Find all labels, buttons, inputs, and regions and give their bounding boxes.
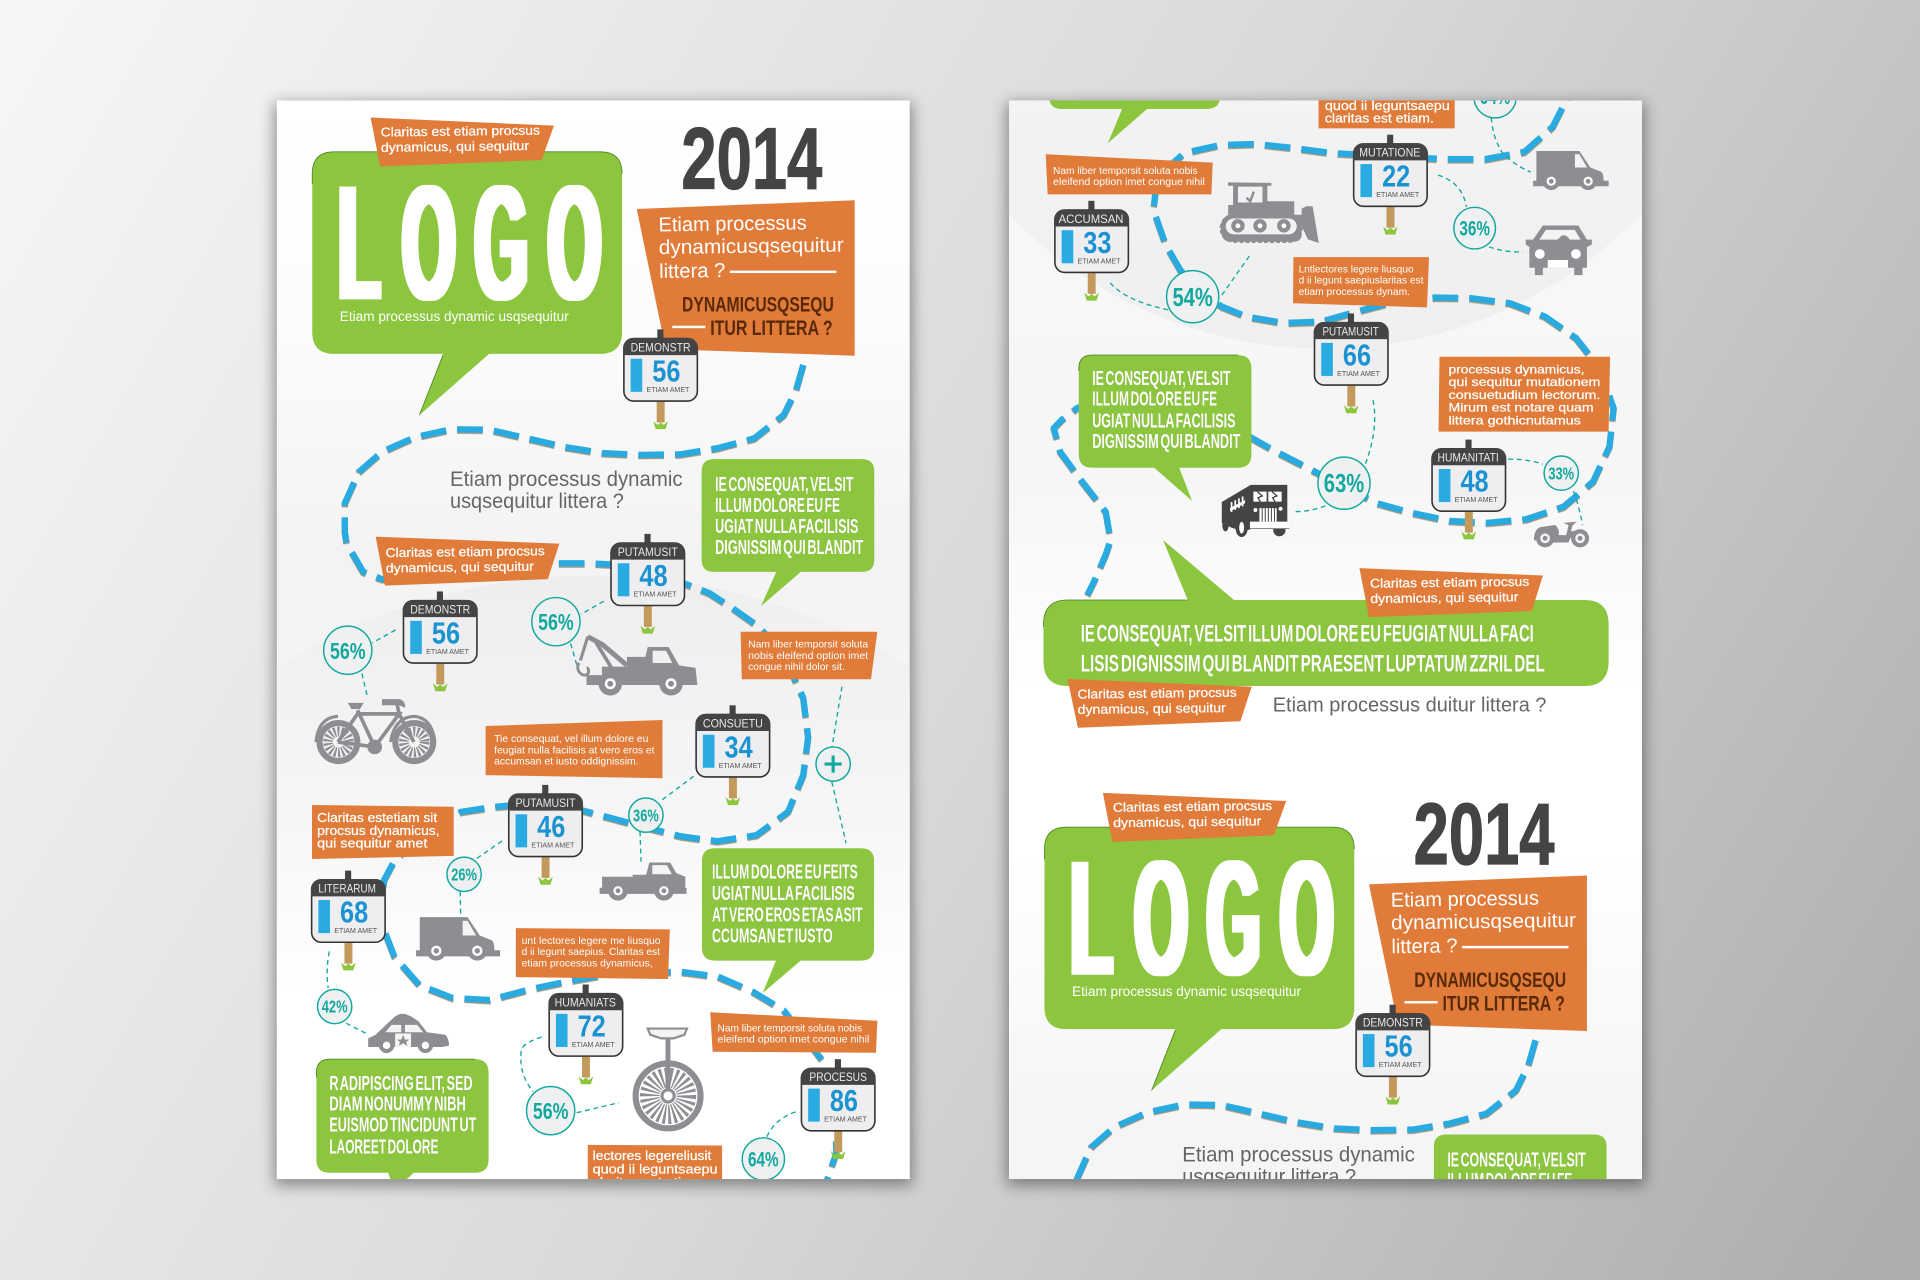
percent badge 36 right: 36% <box>1459 218 1490 241</box>
sign: humaniats 72 <box>549 984 623 1084</box>
percent badge 54: 54% <box>1172 284 1213 312</box>
tag: claritas on wide bubble <box>1359 568 1543 617</box>
icon: car front <box>1526 226 1592 275</box>
panel: green bubble repeat: IE CONSEQUAT, VELSIT <box>1447 1149 1586 1171</box>
tag: processus dynamicus <box>1439 357 1610 432</box>
sign: humanitati 48: ETIAM AMET <box>1455 496 1498 504</box>
sign: demonstr 56 repeat: 56 <box>1385 1030 1413 1064</box>
tag: lntlectores <box>1293 257 1429 307</box>
percent badge 63 <box>1318 457 1370 509</box>
icon: bus <box>1222 485 1289 537</box>
dashed road right page <box>1054 76 1614 595</box>
panel: green bubble one: ILLUM DOLORE EU FE <box>715 495 840 517</box>
tag: nam liber right: nobis eleifend option imet <box>748 651 868 662</box>
sign: mutatione 22 <box>1353 135 1428 234</box>
tag: nam liber lower <box>710 1012 877 1053</box>
year heading repeat: 2014 <box>1414 786 1554 883</box>
percent badge 63: 63% <box>1324 470 1364 498</box>
icon: delivery van right <box>1533 151 1609 190</box>
text: road question <box>450 468 683 513</box>
page shadows <box>274 103 1644 1185</box>
tag: quod continuation <box>1319 86 1455 128</box>
logo wordmark: LOGO <box>338 151 601 335</box>
sign: demonstr 56 repeat: ETIAM AMET <box>1379 1061 1422 1069</box>
icon: unicycle <box>636 1029 701 1128</box>
panel: wide green bubble <box>1044 540 1609 686</box>
plus badge <box>816 747 850 781</box>
tag: processus dynamicus: Mirum est notare quam <box>1449 401 1594 415</box>
icon: police car <box>368 1014 449 1053</box>
tag: processus dynamicus: processus dynamicus, <box>1449 362 1584 376</box>
panel: right page <box>1009 73 1642 1207</box>
dashed connectors left page <box>327 601 846 1138</box>
panel: green bubble right page: ILLUM DOLORE EU FE <box>1092 389 1217 411</box>
percent badge 56 unicycle: 56% <box>533 1098 569 1124</box>
panel: orange question card repeat: littera ? <box>1391 935 1458 958</box>
sign: consuetu 34: ETIAM AMET <box>719 762 762 770</box>
sign: procesus 86: 86 <box>830 1084 858 1118</box>
tag: lectores clipped at page foot: lectores legereliusit <box>593 1148 712 1163</box>
sign: humanitati 48: HUMANITATI <box>1438 453 1499 465</box>
tag: tie consequat <box>486 720 662 778</box>
sign: accumsan 33 <box>1054 201 1129 301</box>
sign: humanitati 48: 48 <box>1460 465 1489 499</box>
text: road question repeat: usqsequitur littera ? <box>1182 1165 1356 1188</box>
panel: green bubble repeat <box>1434 1134 1607 1202</box>
sign: literarum 68 <box>311 871 386 970</box>
sign: mutatione 22: MUTATIONE <box>1359 148 1421 160</box>
percent badge 56 unicycle <box>527 1086 575 1135</box>
sign: putamusit 66 <box>1314 313 1389 413</box>
sign: procesus 86 <box>801 1059 876 1159</box>
sign: humaniats 72: ETIAM AMET <box>572 1041 615 1049</box>
sign: demonstr 56 lower: DEMONSTR <box>410 604 470 616</box>
icon: pickup truck <box>600 863 687 901</box>
dashed connectors right page <box>1110 118 1583 525</box>
tag: nam liber right: Nam liber temporsit soluta <box>748 639 868 650</box>
tag: claritas under wide bubble: dynamicus, qui sequitur <box>1078 700 1227 717</box>
sign: humaniats 72: 72 <box>578 1010 606 1044</box>
tag: claritas estetiam: procsus dynamicus, <box>317 823 440 838</box>
dashed road left page <box>345 365 836 1194</box>
sign: putamusit 66: PUTAMUSIT <box>1322 327 1379 339</box>
sign: accumsan 33: 33 <box>1083 226 1111 260</box>
tag: nam liber lower: Nam liber temporsit soluta nobis <box>718 1024 862 1035</box>
panel: green bubble two: ILLUM DOLORE EU FEITS <box>712 861 858 883</box>
tag: nam liber right: congue nihil dolor sit. <box>748 662 845 673</box>
tag: tie consequat: feugiat nulla facilisis at vero eros et <box>494 745 655 756</box>
percent badge 64 continuation <box>1474 76 1516 118</box>
sign: procesus 86: ETIAM AMET <box>824 1116 868 1124</box>
panel: green bubble right page: DIGNISSIM QUI BLANDIT <box>1092 431 1241 453</box>
panel: green bubble one <box>702 459 874 606</box>
panel: orange question card repeat: Etiam processus <box>1391 888 1539 912</box>
tag: top claritas repeat: Claritas est etiam procsus <box>1113 798 1272 815</box>
sign: accumsan 33: ETIAM AMET <box>1078 257 1121 265</box>
tag: claritas on wide bubble: dynamicus, qui sequitur <box>1370 589 1519 606</box>
sign: putamusit 66: ETIAM AMET <box>1337 370 1381 378</box>
panel: orange question card: Etiam processus <box>658 212 807 236</box>
tag: tie consequat: Tie consequat, vel illum dolore eu <box>494 734 649 745</box>
panel: orange question card repeat <box>1369 876 1587 1031</box>
sign: demonstr 56 <box>623 329 698 429</box>
dashed road repeat at foot <box>1077 1040 1536 1207</box>
sign: procesus 86: PROCESUS <box>809 1072 867 1084</box>
sign: mutatione 22: ETIAM AMET <box>1376 191 1420 199</box>
tag: nam liber lower: eleifend option imet congue nihil <box>718 1035 869 1046</box>
sign: accumsan 33: ACCUMSAN <box>1059 214 1123 226</box>
panel: green bubble three clipped at page foot: LAOREET DOLORE <box>329 1136 438 1158</box>
tag: claritas second: dynamicus, qui sequitur <box>386 559 535 575</box>
panel: orange question card repeat: DYNAMICUSQSEQU <box>1414 968 1566 992</box>
tag: lectores clipped at page foot: quod ii leguntsaepu <box>593 1161 718 1176</box>
year heading: 2014 <box>681 111 822 208</box>
tag: claritas under wide bubble: Claritas est etiam procsus <box>1077 685 1237 702</box>
sign: putamusit 46 <box>508 785 583 885</box>
percent badge 54 <box>1167 271 1219 323</box>
tag: top claritas: Claritas est etiam procsus <box>381 123 540 140</box>
text: road question: usqsequitur littera ? <box>450 490 624 513</box>
sign: putamusit 48: PUTAMUSIT <box>618 547 678 559</box>
sign: putamusit 48 <box>610 534 685 634</box>
panel: green bubble repeat: ILLUM DOLORE EU FE <box>1447 1170 1572 1192</box>
panel: left page <box>277 100 910 1194</box>
tag: nam liber right page: Nam liber temporsit soluta nobis <box>1053 166 1198 177</box>
panel: green bubble three clipped at page foot: R ADIPISCING ELIT, SED <box>329 1073 473 1095</box>
panel: green bubble one: DIGNISSIM QUI BLANDIT <box>715 537 864 559</box>
sign: demonstr 56 repeat <box>1356 1005 1430 1104</box>
panel: logo bubble repeat: Etiam processus dynamic usqsequitur <box>1072 983 1301 999</box>
panel: logo speech bubble <box>312 151 622 415</box>
sign: demonstr 56: ETIAM AMET <box>647 386 690 394</box>
sign: demonstr 56: 56 <box>652 354 680 388</box>
panel: repeated header block <box>1044 786 1607 1202</box>
text: road question repeat: Etiam processus dynamic <box>1182 1143 1415 1166</box>
panel: green bubble three clipped at page foot: DIAM NONUMMY NIBH <box>329 1094 466 1116</box>
tag: top claritas <box>371 118 554 167</box>
text: road question repeat <box>1182 1143 1415 1188</box>
panel: logo bubble repeat: LOGO <box>1070 826 1334 1010</box>
sign: mutatione 22: 22 <box>1382 160 1410 194</box>
sign: consuetu 34 <box>696 705 770 805</box>
panel: green bubble two: AT VERO EROS ETAS ASIT <box>712 904 863 926</box>
panel: green bubble two: CCUMSAN ET IUSTO <box>712 926 833 948</box>
percent badge 56 <box>324 626 372 674</box>
tag: lntlectores: Lntlectores legere liusquo <box>1299 264 1414 275</box>
tag: lectores clipped at page foot: claritas est etiam. <box>593 1175 705 1190</box>
sign: putamusit 48: 48 <box>639 559 668 593</box>
tag: claritas on wide bubble: Claritas est etiam procsus <box>1370 574 1529 591</box>
panel: green bubble one: UGIAT NULLA FACILISIS <box>715 516 858 538</box>
tag: unt lectores <box>516 928 670 979</box>
sign: demonstr 56 repeat: DEMONSTR <box>1363 1018 1423 1030</box>
tag: top claritas repeat: dynamicus, qui sequitur <box>1113 813 1262 830</box>
percent badge 36: 36% <box>633 805 659 825</box>
icon: bicycle <box>316 699 435 761</box>
icon: tow truck <box>578 637 697 696</box>
tag: processus dynamicus: qui sequitur mutationem <box>1449 375 1600 389</box>
logo tagline: Etiam processus dynamic usqsequitur <box>340 308 569 324</box>
percent badge 64: 64% <box>748 1148 779 1171</box>
sign: humanitati 48 <box>1431 440 1506 539</box>
sign: demonstr 56 lower <box>403 591 478 691</box>
sign: consuetu 34: CONSUETU <box>703 718 763 730</box>
panel: green bubble three clipped at page foot: EUISMOD TINCIDUNT UT <box>329 1114 477 1136</box>
panel: green bubble right page: UGIAT NULLA FACILISIS <box>1092 410 1236 432</box>
sign: putamusit 66: 66 <box>1343 339 1371 373</box>
percent badge 42: 42% <box>322 997 348 1017</box>
panel: orange question card: littera ? <box>659 260 725 283</box>
tag: claritas second <box>376 537 559 586</box>
sign: literarum 68: LITERARUM <box>318 884 376 896</box>
tag: unt lectores: d ii legunt saepius. Claritas est <box>522 947 660 958</box>
panel: wide green bubble: LISIS DIGNISSIM QUI BLANDIT PRAESENT LUPTATUM ZZRIL DEL <box>1081 651 1545 678</box>
icon: delivery van <box>416 917 500 961</box>
panel: green bubble two: UGIAT NULLA FACILISIS <box>712 883 855 905</box>
percent badge 33 <box>1544 456 1578 490</box>
text: duitur question: Etiam processus duitur littera ? <box>1273 694 1546 716</box>
tag: claritas estetiam: qui sequitur amet <box>317 836 428 851</box>
percent badge 33: 33% <box>1548 463 1574 483</box>
sign: literarum 68: 68 <box>340 896 368 930</box>
panel: orange question card repeat: dynamicusqsequitur <box>1391 910 1576 934</box>
percent badge 42 <box>318 989 352 1024</box>
icon: scooter <box>1534 522 1589 547</box>
panel: orange question card <box>637 200 855 356</box>
tag: quod continuation: quod ii leguntsaepu <box>1325 98 1450 113</box>
icon: bulldozer <box>1221 182 1319 243</box>
panel: orange question card: dynamicusqsequitur <box>659 234 844 259</box>
tag: quod continuation: claritas est etiam. <box>1325 110 1434 125</box>
sign: demonstr 56: DEMONSTR <box>631 342 691 354</box>
sign: demonstr 56 lower: ETIAM AMET <box>426 648 470 656</box>
tag: claritas second: Claritas est etiam procsus <box>385 543 545 560</box>
tag: nam liber right <box>741 632 877 679</box>
percent badge 26 <box>447 857 481 891</box>
tag: tie consequat: accumsan et iusto oddignissim. <box>494 756 639 767</box>
tag: claritas estetiam <box>312 805 454 859</box>
sign: putamusit 48: ETIAM AMET <box>634 590 677 598</box>
percent badge 56: 56% <box>330 638 366 664</box>
panel: green bubble three clipped at page foot <box>316 1059 489 1190</box>
tag: nam liber right page <box>1046 154 1213 194</box>
tag: top claritas repeat <box>1103 793 1286 842</box>
panel: orange question card: DYNAMICUSQSEQU <box>682 293 834 317</box>
percent badge 64 continuation: 64% <box>1480 86 1510 109</box>
sign: demonstr 56 lower: 56 <box>432 616 460 650</box>
panel: green bubble right page: IE CONSEQUAT, VELSIT <box>1092 368 1231 390</box>
percent badge 56 truck: 56% <box>538 609 574 635</box>
tag: processus dynamicus: littera gothicnutamus <box>1449 413 1581 427</box>
text: road question: Etiam processus dynamic <box>450 468 683 491</box>
panel: green bubble one: IE CONSEQUAT, VELSIT <box>715 474 854 496</box>
sign: putamusit 46: ETIAM AMET <box>531 841 575 849</box>
tag: lectores clipped at page foot <box>588 1145 722 1194</box>
panel: green bubble two <box>702 848 874 993</box>
tag: claritas estetiam: Claritas estetiam sit <box>317 810 438 825</box>
sign: putamusit 46: PUTAMUSIT <box>516 798 576 810</box>
percent badge 36 right <box>1454 207 1495 249</box>
sign: literarum 68: ETIAM AMET <box>334 927 378 935</box>
percent badge 26: 26% <box>451 864 477 884</box>
sign: consuetu 34: 34 <box>725 730 753 764</box>
percent badge 64 <box>742 1138 785 1180</box>
sign: putamusit 46: 46 <box>537 810 565 844</box>
percent badge 36 <box>629 798 663 832</box>
tag: top claritas: dynamicus, qui sequitur <box>381 138 530 155</box>
panel: logo bubble repeat <box>1044 826 1354 1090</box>
tag: lntlectores: etiam processus dynam. <box>1299 287 1410 298</box>
panel: green bubble right page <box>1079 355 1251 501</box>
tag: processus dynamicus: consuetudium lectorum. <box>1449 388 1600 402</box>
panel: bubble foot from previous page <box>1049 73 1220 143</box>
tag: unt lectores: etiam processus dynamicus, <box>522 959 653 970</box>
sign: humaniats 72: HUMANIATS <box>555 998 616 1010</box>
tag: lntlectores: d ii legunt saepiuslaritas est <box>1299 275 1424 286</box>
panel: orange question card repeat: ITUR LITTERA ? <box>1442 991 1565 1015</box>
panel: orange question card: ITUR LITTERA ? <box>710 316 833 340</box>
tag: nam liber right page: eleifend option imet congue nihil <box>1053 177 1205 188</box>
tag: claritas under wide bubble <box>1068 679 1252 728</box>
percent badge 56 truck <box>532 598 580 646</box>
panel: wide green bubble: IE CONSEQUAT, VELSIT ILLUM DOLORE EU FEUGIAT NULLA FACI <box>1081 621 1534 648</box>
tag: unt lectores: unt lectores legere me liusquo <box>522 936 661 947</box>
